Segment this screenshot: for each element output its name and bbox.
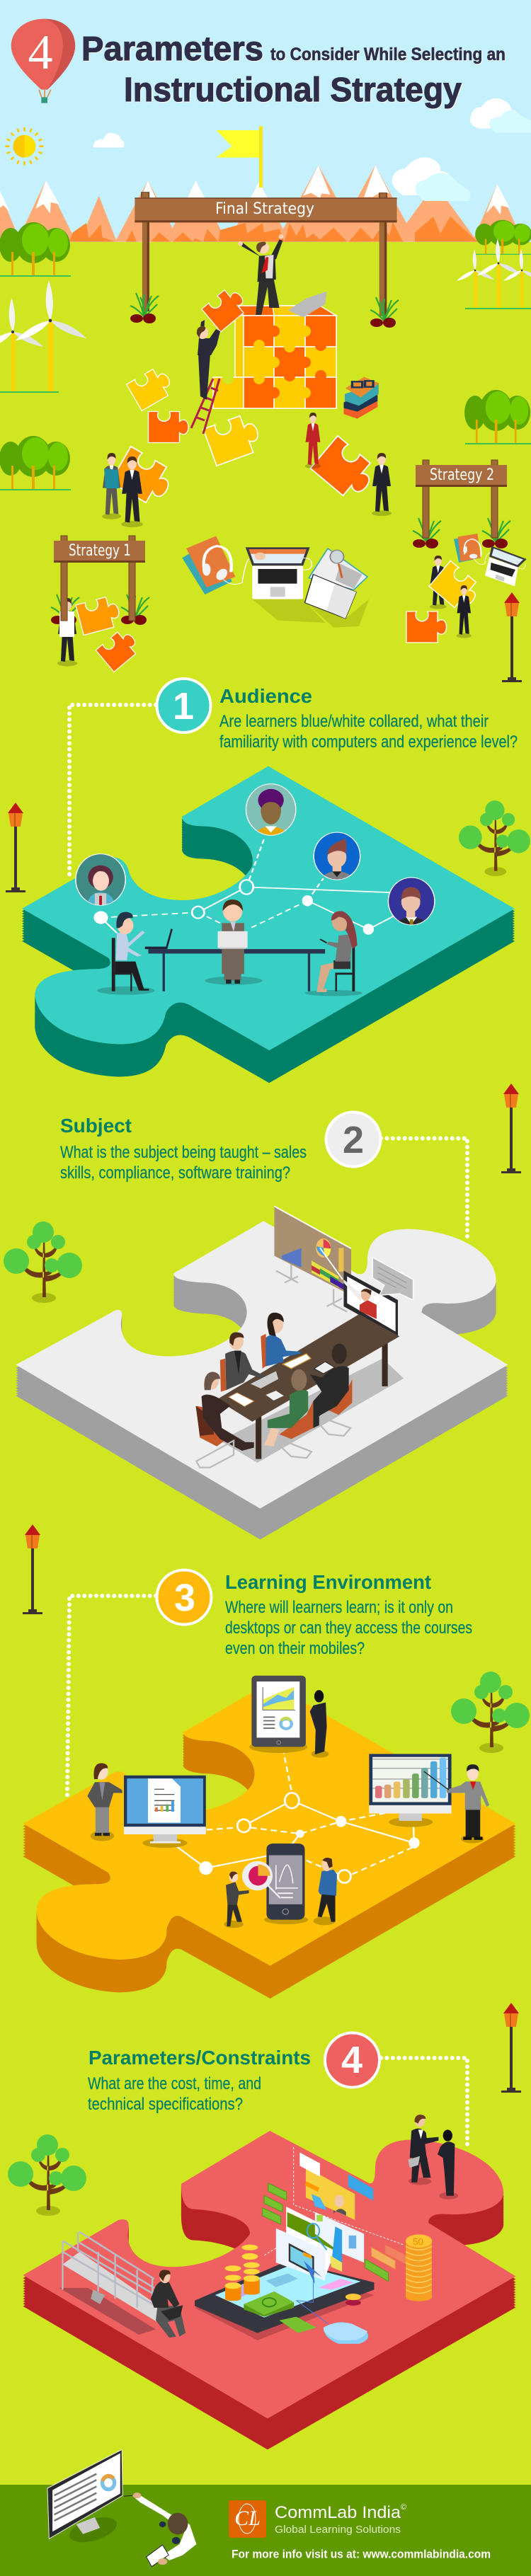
windmills left — [0, 280, 88, 393]
piece: carried to right — [310, 436, 379, 503]
mountains — [0, 165, 523, 242]
man in black — [457, 585, 472, 638]
number badge 4: 4 — [341, 2039, 362, 2081]
network nodes — [199, 1793, 420, 1883]
network nodes — [93, 880, 374, 935]
speech bubble — [372, 1258, 413, 1300]
person: man in brown — [195, 1372, 254, 1468]
puzzle platform — [16, 1206, 508, 1539]
person: man with glasses presenting — [424, 1764, 489, 1844]
lamp — [501, 2003, 521, 2093]
section 1: Audience — [22, 679, 530, 1083]
signs: Strategy 1 and Strategy 2 — [54, 460, 507, 621]
description: Subject — [60, 1143, 307, 1183]
learning devices: book, laptop, open book — [182, 536, 372, 628]
tree cluster right middle — [464, 390, 531, 444]
clouds — [93, 98, 531, 201]
device: smartphone — [242, 1844, 308, 1924]
description: Parameters/Constraints: What are the cost, time, and — [88, 2074, 261, 2093]
logo: CommLab India: CL — [234, 2507, 261, 2530]
description: Subject: What is the subject being taught – sales — [60, 1143, 307, 1162]
piece: orange by Strategy 2 — [406, 611, 447, 643]
person: man with laptop on ramp — [151, 2270, 185, 2338]
connector dots — [69, 705, 156, 878]
open book with magnifier — [304, 548, 367, 619]
small tree — [4, 1221, 82, 1303]
windmills right — [456, 238, 531, 309]
device: desktop monitor with document — [124, 1776, 206, 1848]
title — [81, 30, 506, 109]
heading: Parameters/Constraints: Parameters/Constraints — [88, 2047, 311, 2069]
people carrying pieces — [57, 413, 484, 666]
description: Parameters/Constraints: technical specifications? — [88, 2095, 243, 2114]
person: woman in blue — [261, 1313, 301, 1369]
video monitor — [343, 1271, 398, 1336]
person: man right of phone — [313, 1858, 337, 1925]
connector dots — [67, 1596, 156, 1796]
lamp — [501, 1083, 521, 1173]
person: man in grey suit — [220, 1333, 278, 1391]
heading: Subject: Subject — [60, 1115, 132, 1137]
label on coin stack: 50 — [413, 2236, 423, 2247]
table and laptop — [97, 928, 362, 996]
lamp — [23, 1524, 42, 1614]
title: Instructional Strategy — [124, 71, 462, 109]
person: man left — [112, 912, 149, 991]
number badge 3: 3 — [174, 1577, 195, 1619]
description: Audience — [219, 712, 518, 752]
sign label: Final Strategy — [215, 200, 314, 218]
device: tablet with cash — [195, 2261, 375, 2340]
signs: Strategy 1 and Strategy 2: Strategy 1 — [69, 542, 131, 560]
website: For more info visit us at: www.commlabindia.com — [232, 2548, 491, 2560]
number badge 4 — [325, 2032, 379, 2088]
piece: by Strategy 1 — [76, 594, 122, 636]
lamp — [502, 592, 522, 682]
loose puzzle pieces — [76, 284, 447, 672]
illustration: person at monitor — [47, 2449, 196, 2567]
description: Learning Environment: even on their mobiles? — [225, 1639, 365, 1658]
lamps — [6, 592, 522, 2093]
description: Learning Environment: desktops or can they access the courses — [225, 1618, 472, 1638]
man carrying right — [372, 453, 392, 516]
network lines — [101, 839, 411, 933]
small tree — [451, 1672, 530, 1753]
balloon number: 4 — [28, 25, 52, 80]
person: man centre — [218, 899, 248, 984]
description: Learning Environment: Where will learners learn; is it only on — [225, 1598, 453, 1617]
ramp with railings — [59, 2232, 169, 2335]
small devices near Strategy 2 — [454, 534, 527, 586]
connector dots — [381, 2058, 467, 2147]
number badge 2: 2 — [343, 1119, 364, 1161]
brand name: © — [401, 2503, 406, 2512]
icon: book stack — [343, 377, 379, 419]
person: man in black — [310, 1344, 352, 1436]
person: woman right — [316, 911, 358, 992]
tree cluster left top — [0, 222, 71, 277]
piece: held above cube — [202, 284, 250, 332]
description: Parameters/Constraints — [88, 2074, 261, 2114]
description: Learning Environment — [225, 1598, 472, 1658]
title: to Consider While Selecting an — [270, 45, 506, 64]
device: tablet — [249, 1676, 307, 1753]
headphones book — [182, 536, 249, 594]
piece: carried by Strategy 2 men — [429, 560, 484, 614]
coin stacks — [225, 2234, 432, 2306]
small tree — [8, 2134, 86, 2216]
icon: hot air balloon — [11, 19, 75, 103]
number badge 1 — [157, 679, 211, 732]
section 4: Parameters/Constraints — [8, 2032, 515, 2449]
piece: orange square — [149, 412, 188, 443]
tree cluster right top — [475, 220, 531, 255]
trees and windmills — [0, 220, 531, 625]
icon: sun — [6, 127, 44, 166]
avatar: man on blue — [313, 832, 361, 880]
person: man left of phone — [224, 1871, 249, 1928]
person: man viewing tablet — [310, 1690, 329, 1758]
puzzle platform — [23, 1676, 515, 1999]
heading: Learning Environment: Learning Environment — [225, 1571, 431, 1593]
puzzle platform — [22, 766, 515, 1083]
footer band — [0, 2449, 531, 2576]
description: Subject: skills, compliance, software training? — [60, 1163, 290, 1183]
piece: carried by couple — [110, 447, 176, 508]
lamp — [6, 803, 25, 892]
number badge 3 — [157, 1570, 211, 1625]
brand name — [275, 2503, 406, 2536]
piece: yellow large — [203, 412, 263, 466]
brand name: Global Learning Solutions — [275, 2524, 401, 2536]
piece: yellow — [127, 365, 176, 410]
heading: Audience: Audience — [219, 685, 312, 707]
avatar: man on indigo — [388, 877, 435, 926]
man by Strategy 2 — [430, 556, 447, 609]
profile and folder cards — [299, 2153, 373, 2220]
puzzle cube — [213, 306, 336, 408]
tree cluster left middle — [0, 436, 71, 490]
device: chart monitor — [369, 1754, 452, 1827]
avatar: woman — [75, 853, 126, 906]
cash notes — [263, 2183, 406, 2282]
avatar: dark-skinned woman — [245, 783, 296, 836]
flag — [216, 126, 263, 188]
title: Parameters — [81, 30, 263, 68]
two men talking on knob — [408, 2115, 458, 2200]
icon: mouse — [324, 2322, 368, 2344]
connector dots — [381, 1138, 467, 1241]
number badge 2 — [326, 1112, 381, 1166]
section 3: Learning Environment — [23, 1570, 530, 1999]
ladder and climber — [191, 320, 220, 434]
grass tufts — [51, 293, 510, 625]
logo: CommLab India — [229, 2500, 266, 2538]
puzzle platform — [23, 2115, 515, 2449]
signs: Strategy 1 and Strategy 2: Strategy 2 — [430, 466, 494, 484]
brand name: CommLab India — [275, 2503, 401, 2522]
laptop — [246, 547, 312, 599]
person: woman in green — [264, 1369, 313, 1458]
person: man pointing at desktop — [87, 1763, 122, 1841]
header scene: mountains and clouds — [0, 19, 531, 316]
web page panels — [264, 2147, 403, 2284]
man by Strategy 1 — [57, 598, 77, 666]
whiteboard with charts — [274, 1206, 351, 1312]
woman in red — [305, 413, 321, 468]
description: Audience: Are learners blue/white collared, what their — [219, 712, 489, 731]
section 2: Subject — [4, 1112, 508, 1539]
woman and man walking — [102, 453, 121, 519]
floor shadow and table — [217, 1314, 404, 1463]
number badge 1: 1 — [173, 685, 194, 728]
sign: Final Strategy posts and board — [135, 192, 397, 316]
small tree — [459, 800, 530, 876]
man with raised arms on cube — [238, 234, 327, 317]
piece: small orange — [96, 627, 142, 672]
network lines — [173, 1749, 414, 1874]
